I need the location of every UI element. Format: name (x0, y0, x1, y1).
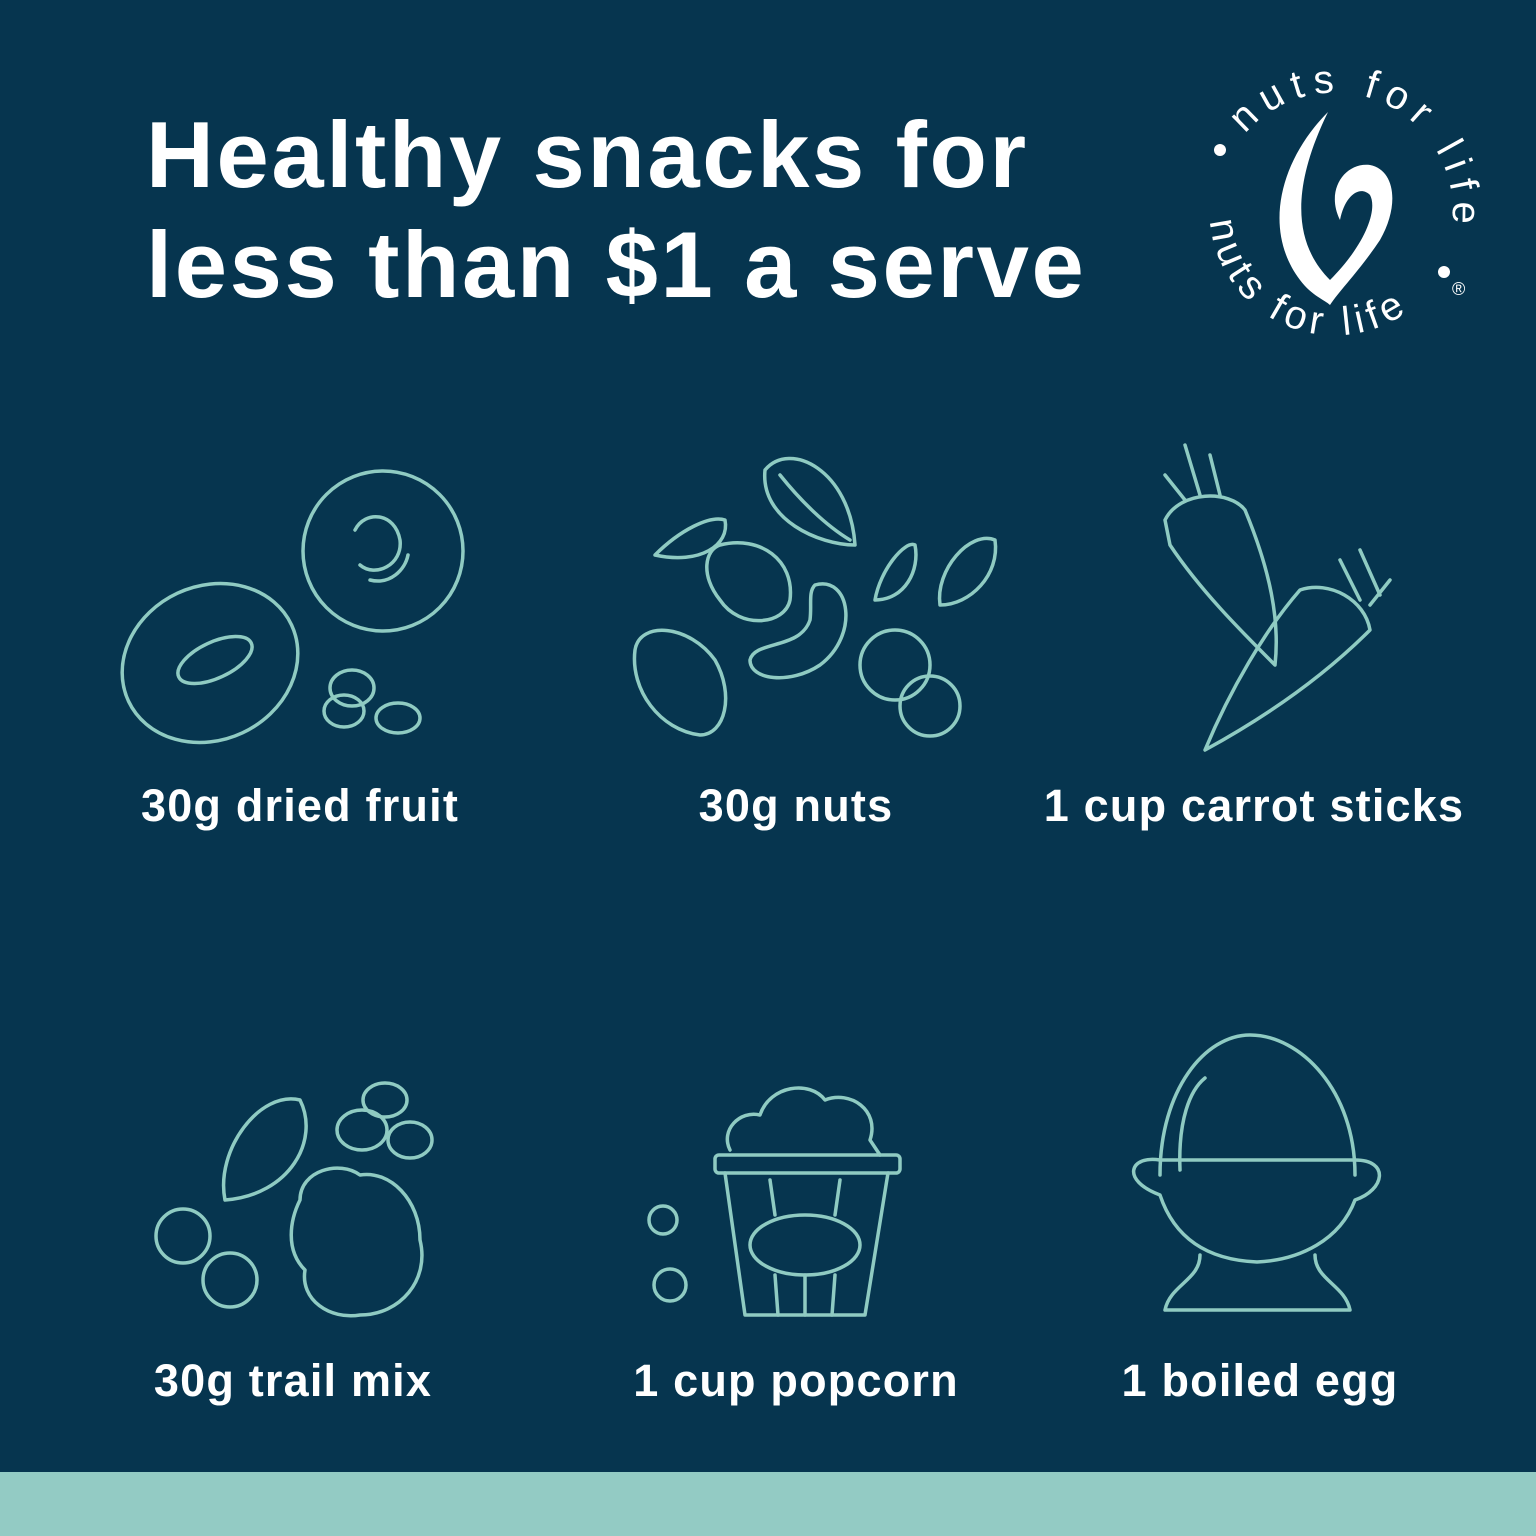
icon: dried fruit (120, 469, 465, 744)
label: carrot: 1 cup carrot sticks (1044, 780, 1464, 831)
title: Healthy snacks for (146, 102, 1029, 207)
icon: egg (1132, 1033, 1382, 1312)
label: egg: 1 boiled egg (1122, 1355, 1398, 1406)
logo (1210, 70, 1480, 335)
icon: popcorn (647, 1086, 902, 1317)
label: popcorn: 1 cup popcorn (633, 1355, 959, 1406)
icon: nuts (632, 456, 998, 738)
label: trail mix: 30g trail mix (154, 1355, 432, 1406)
logo: ® (1452, 279, 1465, 299)
logo: nuts for life (1210, 220, 1402, 335)
title (146, 102, 1086, 317)
label: dried fruit: 30g dried fruit (141, 780, 459, 831)
logo: nuts for life (1232, 70, 1480, 222)
label: nuts: 30g nuts (699, 780, 893, 831)
icon: carrots (1163, 443, 1392, 752)
icon: trail mix (154, 1081, 434, 1318)
title: less than $1 a serve (146, 212, 1086, 317)
footer band (0, 1472, 1536, 1536)
